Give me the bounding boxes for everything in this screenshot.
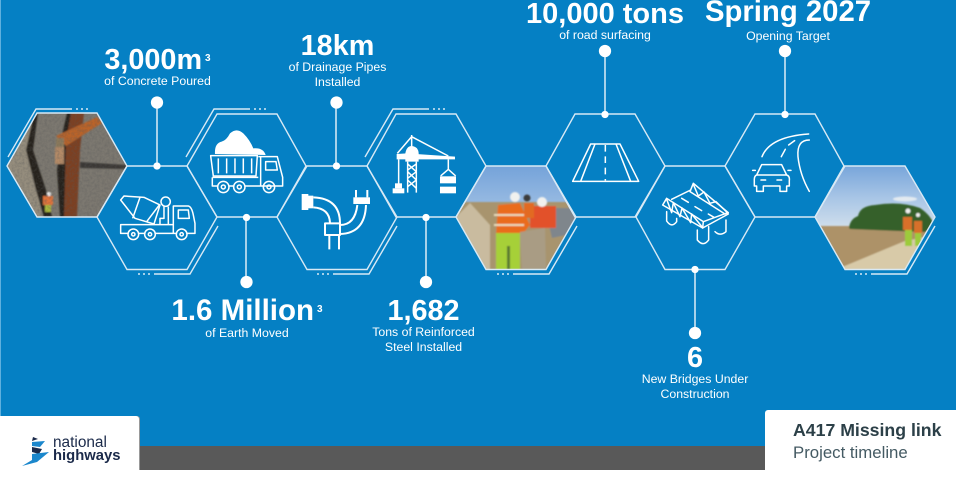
photo: surveyors in field: [816, 166, 934, 269]
logo card: [0, 416, 139, 470]
connector pins: [152, 46, 790, 338]
icon: drainage pipes: [302, 190, 370, 249]
stat: 1.6 million earth: 1.6 Million 3: [171, 294, 323, 327]
photo: workers in orange: [456, 166, 575, 269]
stat: 6 new bridges: 6: [687, 342, 703, 374]
project title: A417 Missing link: [793, 420, 941, 440]
timeline graphic: [6, 44, 936, 340]
project title: [793, 420, 942, 462]
stat: 10,000 tons road surfacing: of road surfacing: [559, 28, 651, 42]
icon: concrete mixer: [121, 196, 195, 240]
title card: [765, 410, 956, 470]
stat: 1,682 tons of steel: Steel Installed: [385, 340, 462, 354]
stat: 18km drainage pipes: of Drainage Pipes: [289, 60, 386, 74]
stat: 1.6 million earth: of Earth Moved: [205, 326, 289, 340]
stat: 1,682 tons of steel: [372, 295, 475, 354]
icon: dump truck with earth: [211, 130, 283, 193]
photo: excavator in trench: [8, 114, 126, 216]
outer accent lines: [8, 109, 88, 157]
stat: 18km drainage pipes: Installed: [315, 75, 360, 89]
stat: 3,000m3 concrete: of Concrete Poured: [104, 74, 211, 88]
hexagon network outlines: [7, 109, 935, 274]
stat: 1,682 tons of steel: Tons of Reinforced: [372, 325, 475, 339]
icon: tower crane: [393, 135, 456, 193]
icon: car and curving road: [753, 134, 809, 191]
logo wordmark: highways: [53, 448, 120, 464]
project title: Project timeline: [793, 442, 908, 462]
stat: 6 new bridges: New Bridges Under: [642, 372, 748, 386]
stat: 3,000m3 concrete: 3,000m 3: [104, 44, 211, 76]
grey footer bar: [139, 446, 769, 470]
stat: 6 new bridges: Construction: [660, 387, 730, 401]
icon: national highways logo mark: [22, 437, 49, 466]
stat: Spring 2027 opening: Opening Target: [746, 29, 830, 43]
icon: road: [573, 144, 639, 181]
logo wordmark: [53, 434, 120, 464]
logo wordmark: national: [53, 434, 107, 450]
stat: 6 new bridges: [642, 342, 748, 401]
stat: 18km drainage pipes: 18km: [301, 30, 374, 62]
stat: 18km drainage pipes: [289, 30, 386, 89]
icon: bridge: [663, 183, 728, 244]
stat: 1,682 tons of steel: 1,682: [387, 295, 460, 327]
stat: Spring 2027 opening: [705, 0, 871, 43]
